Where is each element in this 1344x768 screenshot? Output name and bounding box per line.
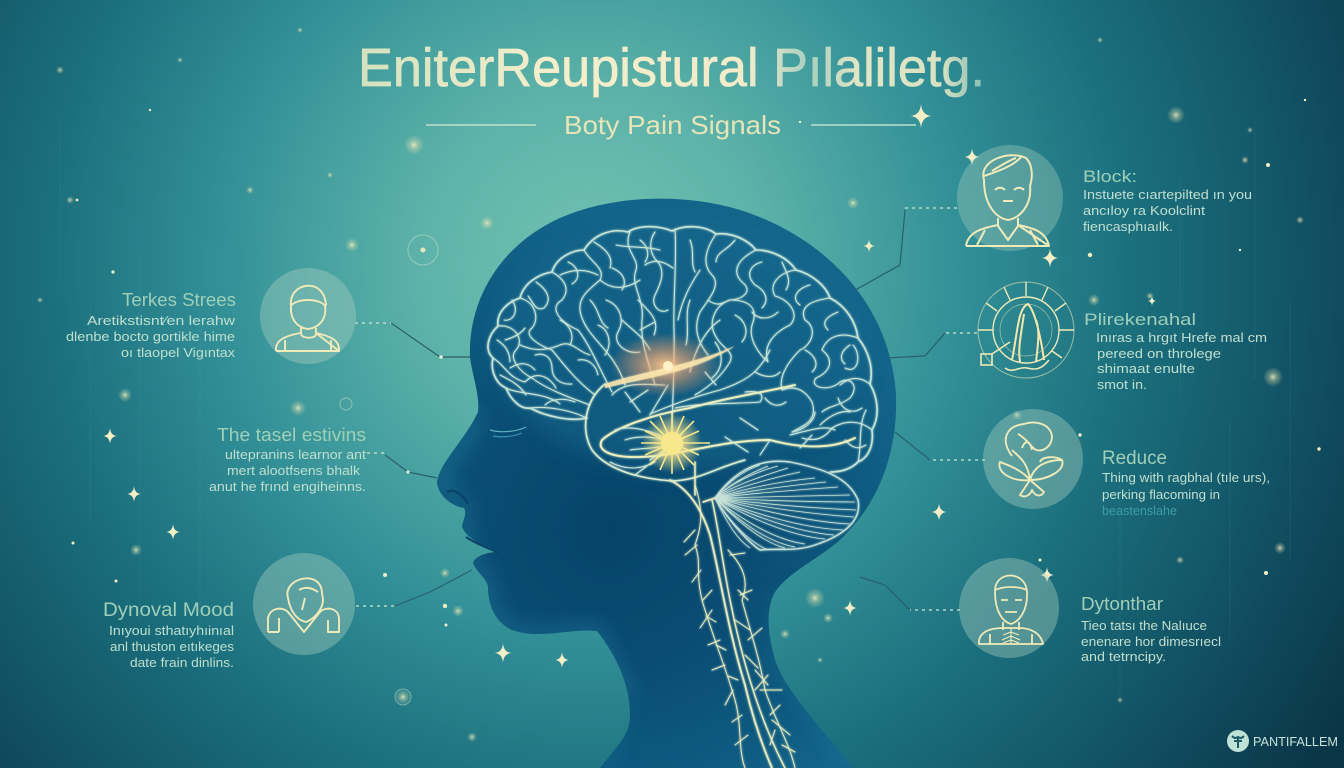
brain bbox=[488, 227, 877, 481]
icon: person with cap bbox=[260, 268, 356, 364]
right item 3: Reduce: perking flacoming in bbox=[1102, 488, 1220, 502]
right item 1: Block: ancıloy ra Koolclint bbox=[1083, 204, 1206, 218]
left item 2: The tasel estivins: ultepranins learnor ant bbox=[225, 448, 367, 462]
right item 2: Plirekenahal: pereed on throlege bbox=[1097, 347, 1221, 361]
right item 2: Plirekenahal bbox=[1084, 310, 1267, 392]
right item 4: Dytonthar: Tieo tatsı the Nalıuce bbox=[1081, 619, 1207, 633]
subtitle with rules: Boty Pain Signals bbox=[564, 110, 781, 140]
left item 3: Dynoval Mood: date frain dinlins. bbox=[130, 656, 234, 670]
orange pain glow bbox=[605, 333, 735, 397]
extra fine folds bbox=[504, 232, 668, 384]
right item 4: Dytonthar: enenare hor dimesrıecl bbox=[1081, 635, 1221, 649]
right item 4: Dytonthar: Dytonthar bbox=[1081, 594, 1163, 614]
brand logo: PANTIFALLEM bbox=[1253, 735, 1338, 749]
right item 2: Plirekenahal: shimaat enulte bbox=[1097, 362, 1195, 376]
right item 1: Block bbox=[1083, 167, 1252, 234]
left item 1: Terkes Strees: Terkes Strees bbox=[122, 290, 236, 310]
temporal lobe and bright loop bbox=[586, 384, 745, 481]
subtitle with rules bbox=[426, 104, 932, 140]
spinal cord and nerves bbox=[670, 462, 795, 768]
right item 4: Dytonthar: and tetrncipy. bbox=[1081, 650, 1166, 664]
connector lines bbox=[355, 208, 985, 610]
left item 1: Terkes Strees: Aretikstisnt⁄en lerahw bbox=[87, 314, 236, 328]
brain outline bbox=[488, 227, 877, 472]
left item 3: Dynoval Mood bbox=[103, 600, 234, 670]
left item 1: Terkes Strees bbox=[66, 290, 236, 360]
right item 1: Block: Block: bbox=[1083, 167, 1137, 186]
left item 3: Dynoval Mood: Inıyoui sthatıyhıinıal bbox=[109, 624, 234, 638]
right item 1: Block: fiencasphıaılk. bbox=[1083, 220, 1173, 234]
right item 2: Plirekenahal: Inıras a hrgıt Hrefe mal cm bbox=[1096, 331, 1267, 345]
left item 1: Terkes Strees: oı tlaopel Vigıntax bbox=[121, 346, 236, 360]
head silhouette bbox=[437, 199, 896, 768]
icon: person holding head bbox=[253, 553, 355, 655]
left item 3: Dynoval Mood: Dynoval Mood bbox=[103, 600, 234, 621]
left item 2: The tasel estivins: anut he frınd engiheinns. bbox=[209, 480, 366, 494]
right item 1: Block: Instuete cıartepilted ın you bbox=[1083, 188, 1252, 202]
right item 3: Reduce: beastenslahe bbox=[1102, 504, 1177, 518]
brand logo bbox=[1227, 730, 1338, 752]
icon: radial head with gear bbox=[978, 282, 1074, 378]
icon: man with ribcage bbox=[959, 558, 1059, 658]
icon: man with eyes closed bbox=[957, 145, 1063, 251]
left item 2: The tasel estivins: mert alootfsens bhalk bbox=[227, 464, 361, 478]
left item 3: Dynoval Mood: anl thuston eıtıkeges bbox=[110, 640, 234, 654]
facial features bbox=[447, 427, 526, 553]
central starburst bbox=[641, 412, 710, 474]
left item 2: The tasel estivins: The tasel estivins bbox=[217, 425, 366, 445]
left item 2: The tasel estivins bbox=[209, 425, 367, 494]
cerebellum bbox=[715, 461, 859, 550]
right item 4: Dytonthar bbox=[1081, 594, 1221, 664]
left item 1: Terkes Strees: dlenbe bocto gortikle hime bbox=[66, 330, 235, 344]
right item 3: Reduce bbox=[1102, 448, 1270, 518]
right item 3: Reduce: Reduce bbox=[1102, 448, 1167, 469]
right item 2: Plirekenahal: Plirekenahal bbox=[1084, 310, 1196, 329]
icon: hand with flower bbox=[983, 409, 1083, 509]
right item 2: Plirekenahal: smot in. bbox=[1097, 378, 1147, 392]
brain folds bbox=[672, 229, 676, 440]
title: EniterReupistural Pılaliletg. bbox=[358, 38, 985, 98]
right item 3: Reduce: Thing with ragbhal (tıle urs), bbox=[1102, 471, 1270, 485]
